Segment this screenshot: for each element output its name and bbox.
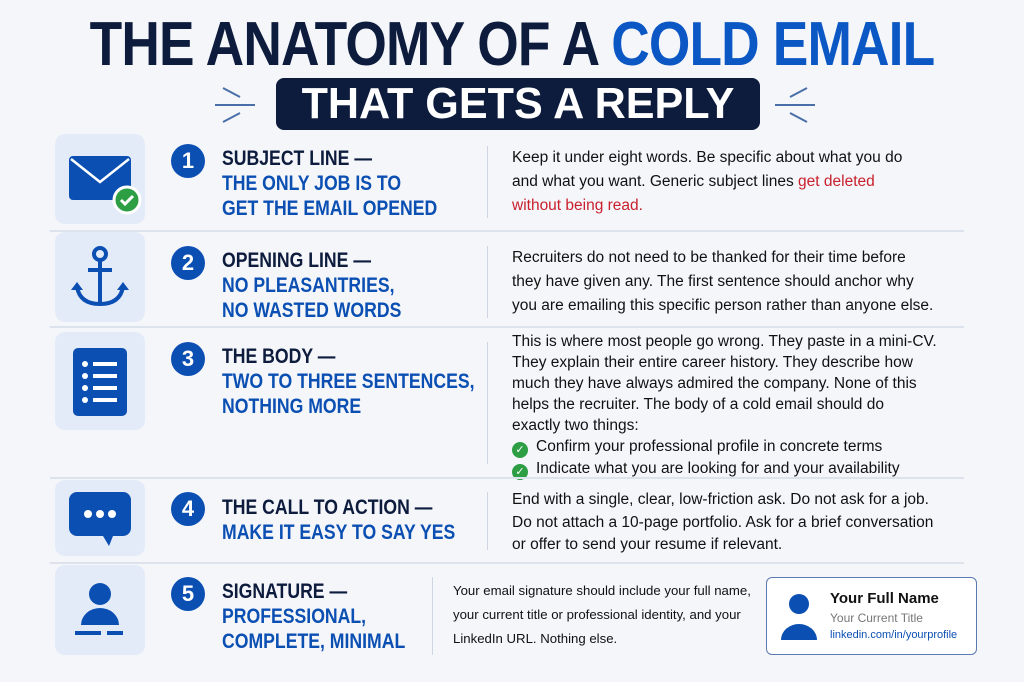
- signature card: linkedin.com/in/yourprofile: [830, 629, 957, 641]
- heading 3: [222, 345, 475, 418]
- row 1: [55, 134, 902, 224]
- icon: anchor: [55, 232, 145, 322]
- text 5: LinkedIn URL. Nothing else.: [453, 631, 617, 646]
- text 3: exactly two things:: [512, 417, 639, 434]
- text 5: your current title or professional identity, and your: [453, 607, 741, 622]
- heading 5: COMPLETE, MINIMAL: [222, 630, 405, 653]
- heading 3: THE BODY —: [222, 345, 335, 368]
- heading 4: THE CALL TO ACTION —: [222, 496, 432, 519]
- text 3: Indicate what you are looking for and your availability: [536, 460, 900, 477]
- text 4: [512, 491, 933, 553]
- text 3: This is where most people go wrong. They paste in a mini-CV.: [512, 333, 937, 350]
- signature card: Your Full Name: [830, 590, 939, 607]
- heading 1: THE ONLY JOB IS TO: [222, 172, 401, 195]
- number 3: 3: [182, 346, 194, 371]
- icon: chat bubble: [55, 480, 145, 556]
- text 2: [512, 249, 933, 314]
- heading 5: PROFESSIONAL,: [222, 605, 366, 628]
- number 4: [171, 492, 205, 526]
- icon: envelope: [55, 134, 145, 224]
- number 1: [171, 144, 205, 178]
- row 3: [55, 332, 937, 480]
- text 2: they have given any. The first sentence should anchor why: [512, 273, 914, 290]
- heading 1: GET THE EMAIL OPENED: [222, 197, 437, 220]
- heading 2: [222, 249, 401, 322]
- number 4: 4: [182, 496, 194, 521]
- number 5: 5: [182, 581, 194, 606]
- heading 4: [222, 496, 455, 544]
- heading 2: NO WASTED WORDS: [222, 299, 401, 322]
- number 3: [171, 342, 205, 376]
- number 1: 1: [182, 148, 194, 173]
- text 3: ✓: [515, 444, 525, 456]
- text 2: you are emailing this specific person rather than anyone else.: [512, 297, 933, 314]
- text 3: much they have always admired the company. None of this: [512, 375, 917, 392]
- row 5: [55, 565, 977, 655]
- text 3: helps the recruiter. The body of a cold email should do: [512, 396, 884, 413]
- text 1: [512, 149, 902, 214]
- text 5: Your email signature should include your full name,: [453, 583, 751, 598]
- heading 2: OPENING LINE —: [222, 249, 371, 272]
- title: THE ANATOMY OF A COLD EMAIL: [90, 10, 934, 79]
- text 4: Do not attach a 10-page portfolio. Ask for a brief conversation: [512, 514, 933, 530]
- text 1: Keep it under eight words. Be specific about what you do: [512, 149, 902, 166]
- text 3: ✓: [515, 466, 525, 478]
- text 1: and what you want. Generic subject lines get deleted: [512, 173, 875, 190]
- icon: person: [55, 565, 145, 655]
- text 4: End with a single, clear, low-friction ask. Do not ask for a job.: [512, 491, 929, 508]
- signature card: Your Current Title: [830, 611, 923, 625]
- number 2: 2: [182, 250, 194, 275]
- text 3: Confirm your professional profile in concrete terms: [536, 438, 882, 455]
- decorative rays: [215, 87, 815, 123]
- heading 4: MAKE IT EASY TO SAY YES: [222, 521, 455, 544]
- icon: list: [55, 332, 145, 430]
- subtitle pill: THAT GETS A REPLY: [302, 79, 734, 128]
- heading 5: [222, 580, 405, 653]
- heading 3: NOTHING MORE: [222, 395, 361, 418]
- text 3: They explain their entire career history. They describe how: [512, 354, 913, 371]
- row 4: [55, 480, 933, 556]
- heading 1: SUBJECT LINE —: [222, 147, 372, 170]
- text 5: [453, 583, 751, 646]
- text 1: without being read.: [512, 197, 643, 214]
- row 2: [55, 232, 933, 322]
- heading 2: NO PLEASANTRIES,: [222, 274, 395, 297]
- heading 3: TWO TO THREE SENTENCES,: [222, 370, 475, 393]
- text 4: or offer to send your resume if relevant.: [512, 536, 782, 553]
- heading 5: SIGNATURE —: [222, 580, 347, 603]
- number 5: [171, 577, 205, 611]
- text 2: Recruiters do not need to be thanked for their time before: [512, 249, 906, 266]
- signature card: [766, 577, 977, 655]
- text 3: [512, 333, 937, 480]
- heading 1: [222, 147, 437, 220]
- number 2: [171, 246, 205, 280]
